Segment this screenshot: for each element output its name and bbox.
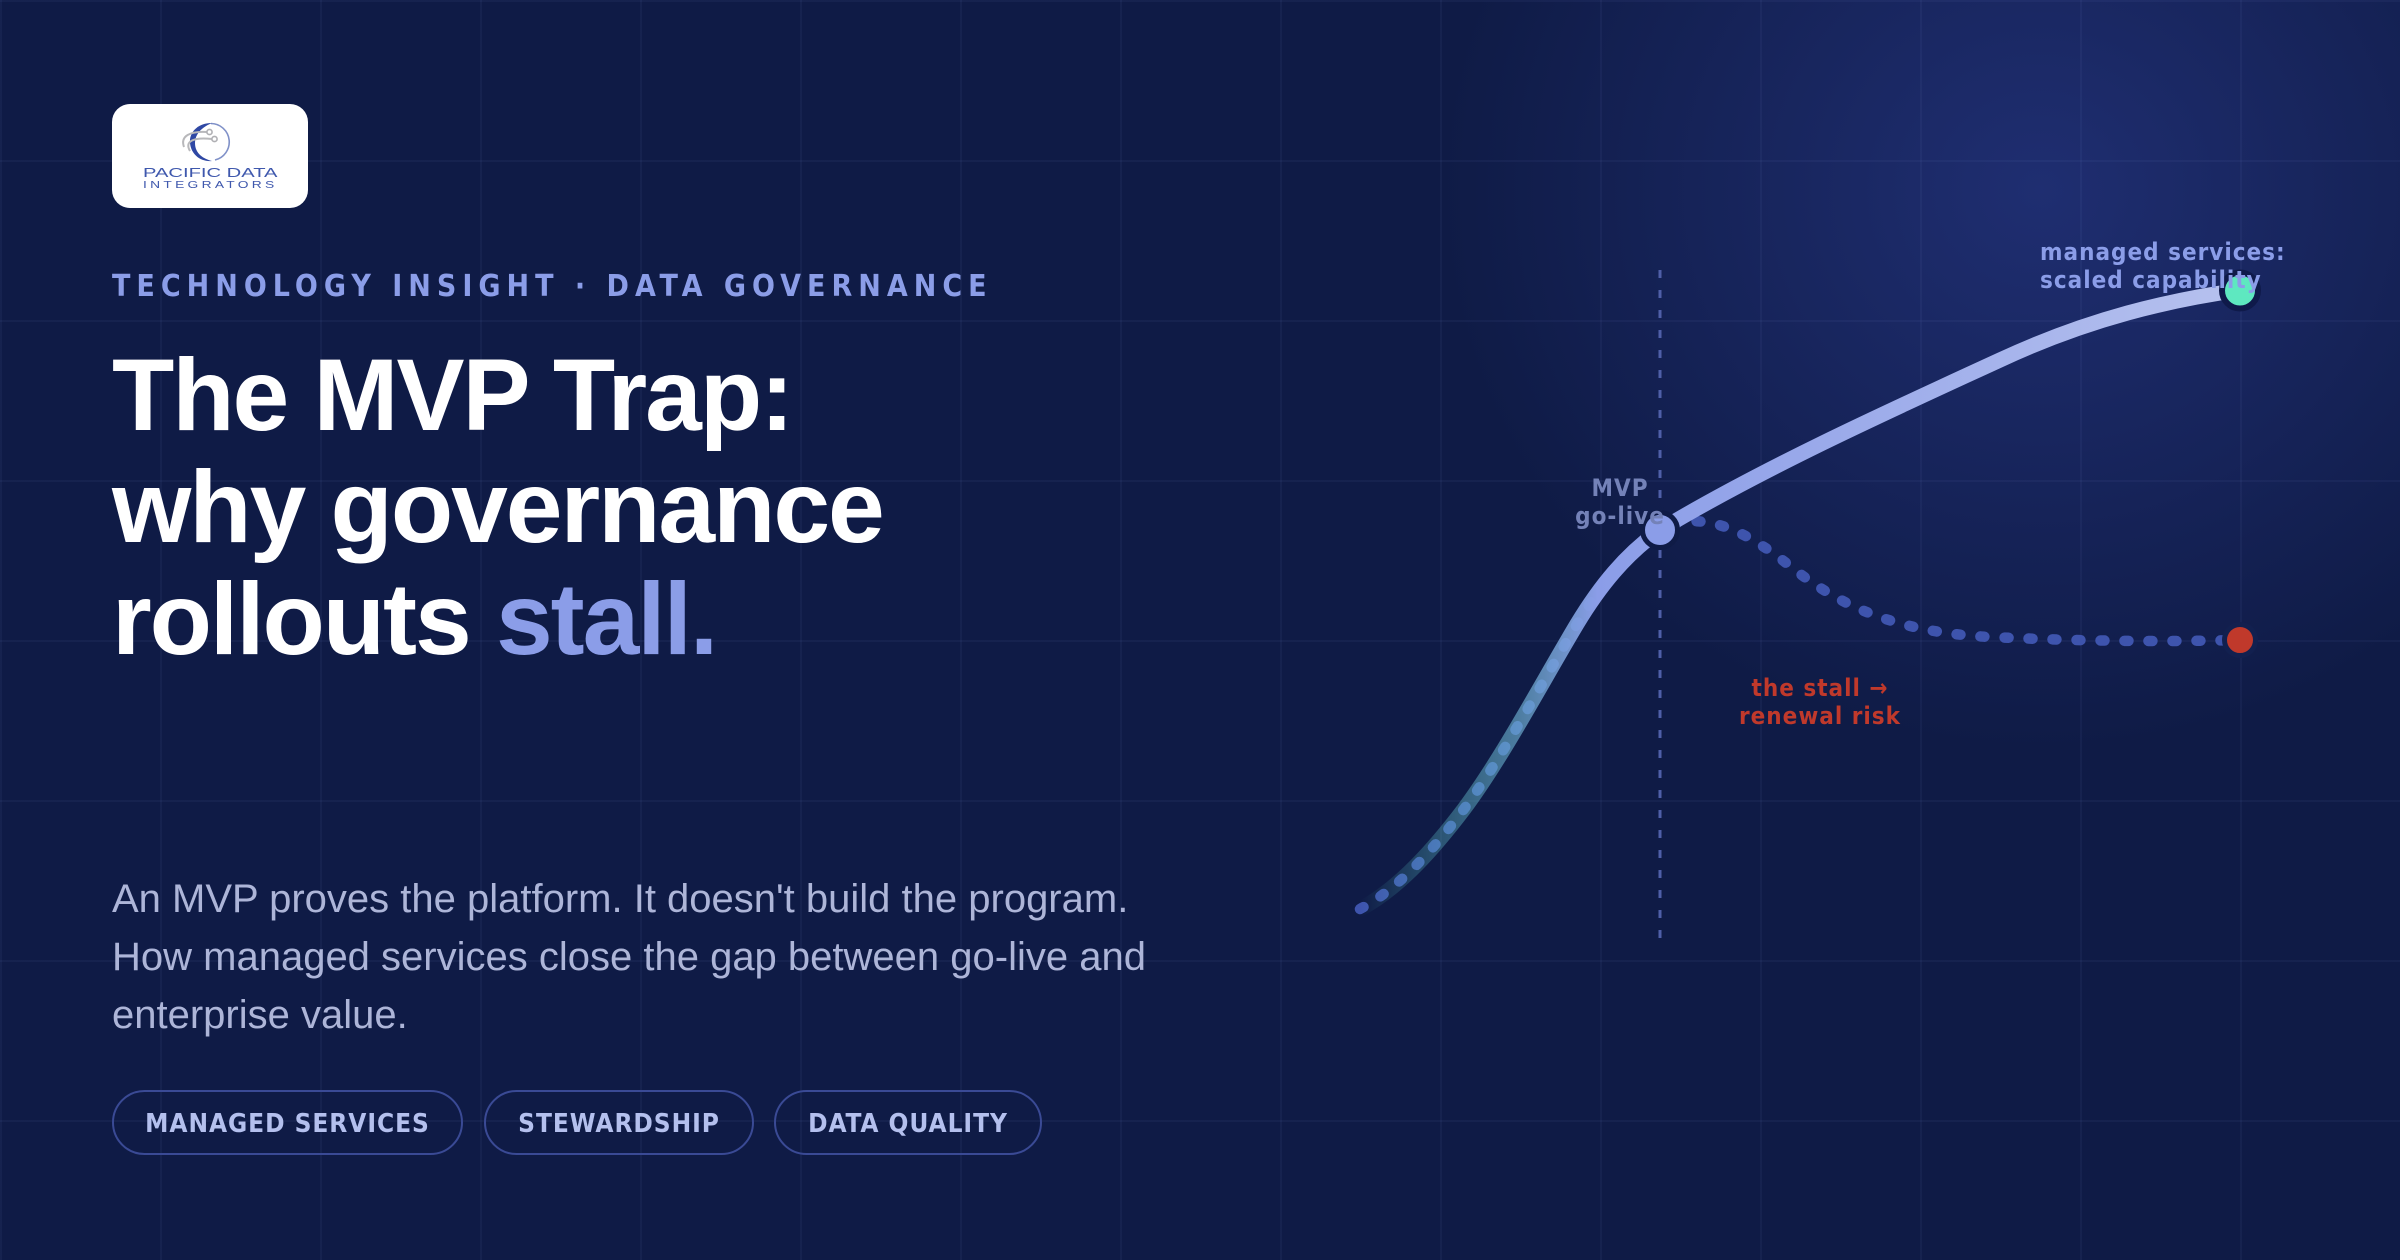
title: The MVP Trap: <box>112 338 792 452</box>
subtitle text block: enterprise value. <box>112 993 408 1037</box>
label: managed services scaled capability: scaled capability <box>2040 266 2262 294</box>
label: managed services scaled capability <box>2040 238 2286 294</box>
title: rollouts stall. <box>112 562 716 676</box>
scaled capability curve <box>1360 290 2240 909</box>
label: MVP go-live <box>1575 474 1665 530</box>
label: managed services scaled capability: managed services: <box>2040 238 2286 266</box>
subtitle text block: How managed services close the gap between go-live and <box>112 935 1146 979</box>
tag: managed services <box>112 1090 463 1155</box>
MVP go-live vertical marker <box>1658 270 1662 940</box>
eyebrow: TECHNOLOGY INSIGHT · DATA GOVERNANCE <box>112 269 993 304</box>
tag: stewardship <box>484 1090 754 1155</box>
label: the stall renewal risk: the stall → <box>1752 674 1888 702</box>
title <box>112 338 883 676</box>
tag: data quality: DATA QUALITY <box>808 1109 1008 1139</box>
label: the stall renewal risk: renewal risk <box>1739 702 1901 730</box>
label: MVP go-live: MVP <box>1591 474 1649 502</box>
icon: logo globe arc <box>183 123 229 161</box>
title: why governance <box>112 450 883 564</box>
label: MVP go-live: go-live <box>1575 502 1665 530</box>
dotted early path <box>1360 530 1660 909</box>
logo wordmark <box>143 166 279 191</box>
logo wordmark: INTEGRATORS <box>143 179 278 191</box>
tag: data quality <box>774 1090 1042 1155</box>
stall end point <box>2224 624 2256 656</box>
tag: stewardship: STEWARDSHIP <box>518 1109 720 1139</box>
tag pills <box>112 1090 1042 1155</box>
subtitle text block: An MVP proves the platform. It doesn't build the program. <box>112 877 1128 921</box>
managed services end point <box>2222 272 2258 308</box>
subtitle text block <box>112 877 1146 1037</box>
dotted stalled path <box>1660 521 2240 641</box>
label: the stall renewal risk <box>1739 674 1901 730</box>
tag: managed services: MANAGED SERVICES <box>145 1109 430 1139</box>
MVP go-live point <box>1642 512 1678 548</box>
logo: Pacific Data Integrators <box>112 104 308 208</box>
logo wordmark: PACIFIC DATA <box>143 166 279 180</box>
